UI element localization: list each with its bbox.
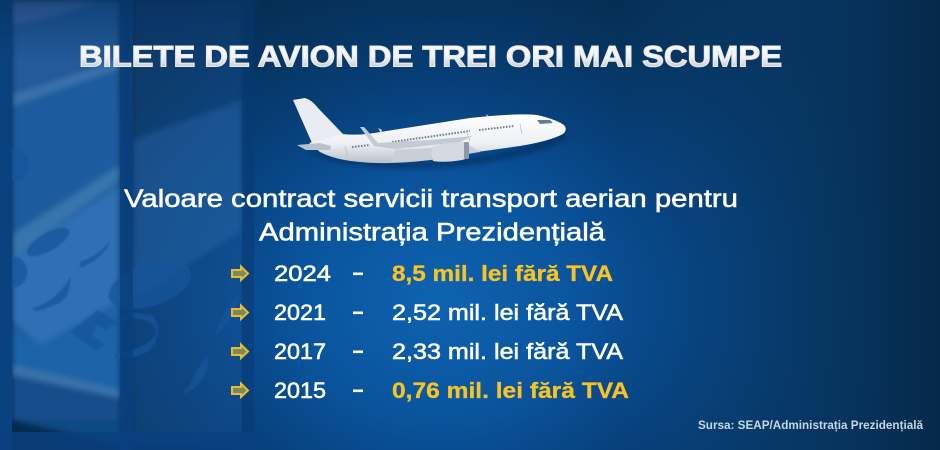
- year: 2017: [274, 339, 326, 364]
- tail fin: [293, 98, 350, 143]
- background photo: banknotes: [3, 0, 242, 445]
- dash: [353, 390, 363, 392]
- dash: [353, 312, 363, 314]
- icon: arrow: [232, 266, 248, 280]
- value: 2,52 mil. lei fără TVA: [392, 300, 623, 325]
- row 2017: [232, 339, 623, 364]
- row 2021: [232, 300, 623, 325]
- value: 8,5 mil. lei fără TVA: [392, 261, 613, 286]
- value: 2,33 mil. lei fără TVA: [392, 339, 623, 364]
- title: BILETE DE AVION DE TREI ORI MAI SCUMPE: [79, 40, 782, 74]
- vertical translucent bands: [0, 0, 260, 450]
- icon: arrow: [232, 344, 248, 358]
- right side dark fade: [620, 0, 940, 450]
- icon: airplane: [293, 98, 566, 168]
- windows: [352, 126, 514, 147]
- door line: [345, 124, 522, 156]
- dash: [353, 272, 363, 275]
- cockpit window: [537, 120, 553, 124]
- year: 2024: [274, 261, 331, 286]
- wing: [360, 127, 473, 149]
- fuselage: [309, 114, 566, 163]
- row 2015: [232, 378, 629, 403]
- icon: arrow: [232, 384, 248, 397]
- heading line 1: Valoare contract servicii transport aerian pentru: [124, 185, 738, 213]
- winglet and antenna: [378, 114, 490, 133]
- row 2024: [232, 261, 613, 286]
- source note: Sursa: SEAP/Administrația Prezidențială: [698, 420, 924, 432]
- contract heading: [124, 185, 738, 246]
- horizontal stabilizer: [297, 143, 331, 150]
- plane shadow: [305, 130, 566, 168]
- value: 0,76 mil. lei fără TVA: [392, 378, 629, 403]
- icon: arrow: [232, 306, 248, 319]
- year: 2015: [274, 378, 326, 403]
- dash: [353, 350, 363, 353]
- year: 2021: [274, 300, 326, 325]
- heading line 2: Administrația Prezidențială: [259, 218, 605, 246]
- engine: [432, 142, 469, 162]
- belly fairing: [392, 146, 480, 162]
